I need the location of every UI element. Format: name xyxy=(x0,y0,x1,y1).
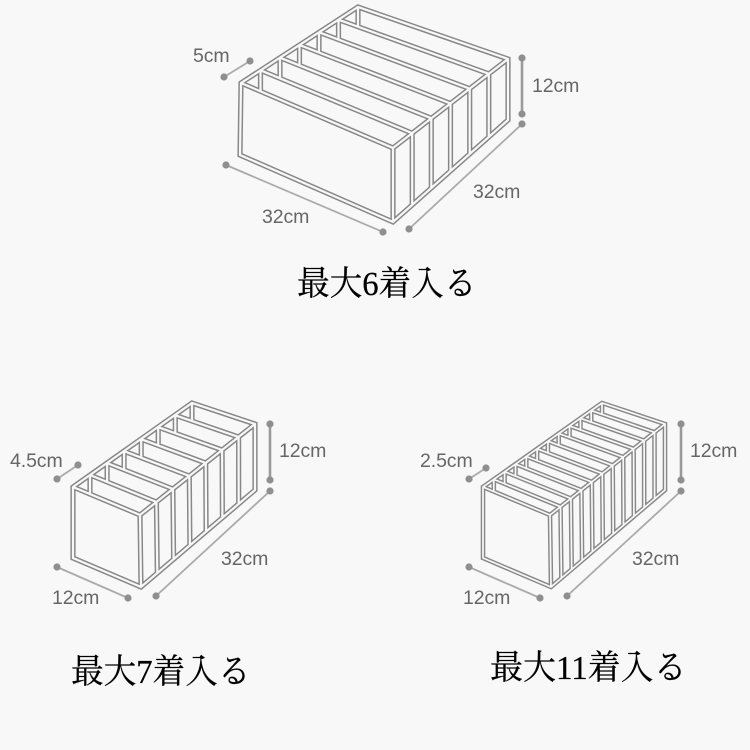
dimension: depth 32cm: 32cm xyxy=(221,548,268,570)
panel: 7-compartment organizer xyxy=(10,403,326,691)
heading: up to 6 items: 最大6着入る xyxy=(297,265,476,303)
icon: 7-compartment box wireframe xyxy=(73,403,255,587)
heading: up to 11 items: 最大11着入る xyxy=(490,650,687,687)
dimension: height 12cm: 12cm xyxy=(690,440,737,462)
dimension: compartment width 2.5cm xyxy=(420,450,490,483)
dimension: compartment width 5cm: 5cm xyxy=(193,45,230,67)
dimension: height 12cm xyxy=(266,420,326,484)
dimension: compartment width 2.5cm: 2.5cm xyxy=(420,450,473,472)
dimension: compartment width 4.5cm xyxy=(10,450,82,483)
icon: 6-compartment box wireframe xyxy=(240,7,508,222)
dimension: height 12cm: 12cm xyxy=(279,440,326,462)
heading: up to 7 items: 最大7着入る xyxy=(71,653,250,691)
dimension: width 12cm xyxy=(52,563,132,609)
dimension: width 32cm: 32cm xyxy=(262,206,309,228)
dimension: depth 32cm: 32cm xyxy=(632,548,679,570)
dimension: width 12cm: 12cm xyxy=(463,587,510,609)
dimension: height 12cm xyxy=(677,420,737,484)
dimension: height 12cm: 12cm xyxy=(532,75,579,97)
dimension: compartment width 5cm xyxy=(193,45,254,81)
panel: 11-compartment organizer xyxy=(420,403,737,687)
icon: 11-compartment box wireframe xyxy=(483,403,665,587)
dimension: depth 32cm: 32cm xyxy=(473,181,520,203)
dimension: compartment width 4.5cm: 4.5cm xyxy=(10,450,63,472)
dimension: height 12cm xyxy=(518,54,579,118)
dimension: width 32cm xyxy=(222,161,387,236)
dimension: width 12cm xyxy=(463,563,544,609)
dimension: depth 32cm xyxy=(405,120,526,233)
dimension: width 12cm: 12cm xyxy=(52,587,99,609)
dimension: depth 32cm xyxy=(563,487,685,600)
dimension: depth 32cm xyxy=(152,487,274,600)
panel: 6-compartment organizer xyxy=(193,7,579,303)
